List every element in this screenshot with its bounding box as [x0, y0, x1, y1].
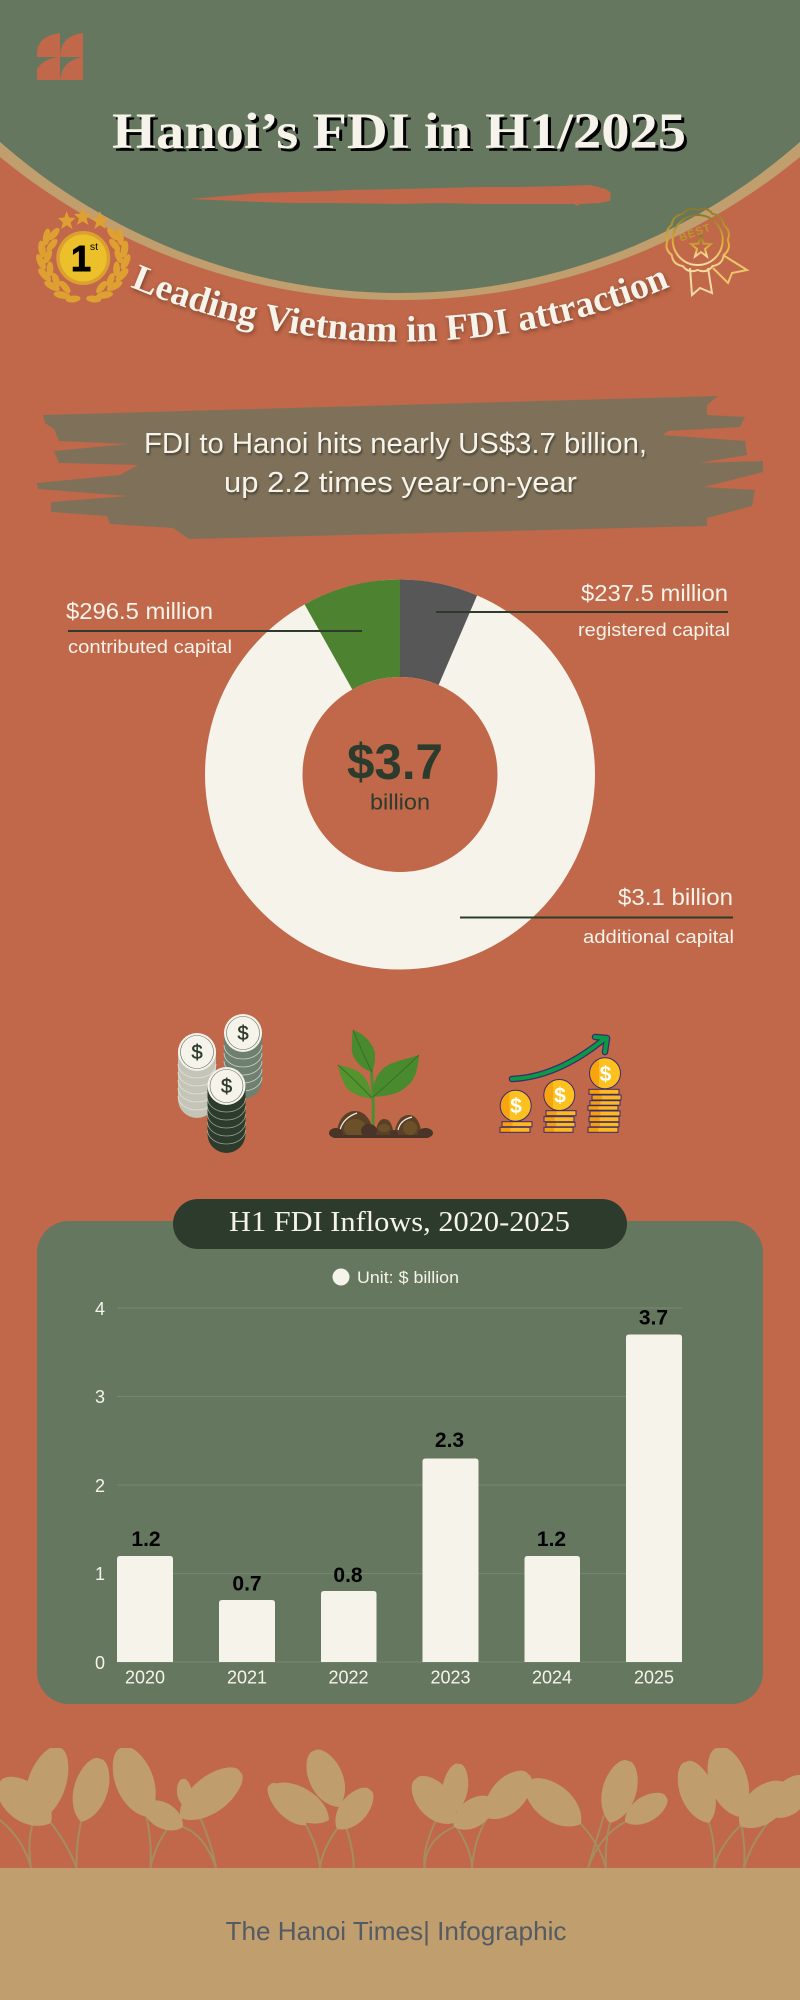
donut centre value: billion — [370, 790, 430, 814]
x axis labels: 2024 — [532, 1668, 572, 1688]
legend: Unit: $ billion — [357, 1268, 459, 1287]
panel heading: H1 FDI Inflows, 2020-2025 — [229, 1206, 570, 1238]
panel heading — [173, 1199, 627, 1249]
x axis labels: 2023 — [430, 1668, 471, 1688]
growth arrow — [512, 1037, 607, 1079]
icon: logo — [37, 33, 83, 80]
coin column 3: $ — [600, 1063, 612, 1086]
icon: coin stacks — [178, 1014, 262, 1153]
plants decoration — [0, 1741, 800, 1868]
bar values: 0.8 — [333, 1564, 363, 1587]
bar values: 1.2 — [537, 1528, 566, 1551]
y axis labels: 1 — [95, 1564, 105, 1584]
banner text: FDI to Hanoi hits nearly US$3.7 billion, — [144, 428, 647, 460]
y axis labels — [95, 1299, 105, 1673]
laurel wreath — [34, 226, 133, 303]
y axis labels: 3 — [95, 1387, 105, 1407]
icon: first place medal — [34, 207, 133, 303]
coin stack medium: $ — [237, 1023, 249, 1045]
x axis labels — [125, 1668, 674, 1688]
panel: FDI inflows chart — [37, 1199, 763, 1704]
callout: contributed capital — [66, 598, 362, 657]
icon: best seal: BEST — [678, 222, 713, 244]
x axis labels: 2020 — [125, 1668, 165, 1688]
callout: additional capital — [460, 884, 734, 947]
segment: contributed capital — [305, 580, 400, 690]
callout: registered capital — [436, 580, 730, 640]
bar values: 2.3 — [435, 1429, 464, 1452]
callout: contributed capital: contributed capital — [68, 637, 232, 657]
bars — [117, 1334, 682, 1662]
y axis labels: 2 — [95, 1476, 105, 1496]
icon: best seal — [666, 209, 747, 295]
bar values: 3.7 — [639, 1306, 668, 1330]
stars — [58, 207, 109, 229]
title: Hanoi’s FDI in H1/2025 — [112, 104, 686, 160]
curved subtitle: Leading Vietnam in FDI attraction — [130, 264, 672, 346]
banner text — [144, 428, 647, 499]
coin stack light: $ — [191, 1042, 203, 1064]
header arc — [0, 0, 800, 300]
coin column 1: $ — [510, 1095, 522, 1118]
medal text: 1 — [71, 238, 91, 279]
coin stack dark: $ — [221, 1076, 232, 1098]
x axis labels: 2021 — [227, 1668, 267, 1688]
banner text: up 2.2 times year-on-year — [224, 467, 577, 499]
leaves — [352, 1030, 375, 1072]
medal disc — [56, 231, 110, 285]
bar values: 0.7 — [232, 1572, 262, 1596]
footer — [0, 1868, 800, 2000]
segment: registered capital — [400, 580, 477, 685]
callout: contributed capital: $296.5 million — [66, 598, 213, 624]
icon: seedling — [329, 1030, 433, 1138]
donut centre value — [347, 734, 443, 814]
coin column 2: $ — [554, 1084, 566, 1108]
y axis labels: 4 — [95, 1299, 105, 1319]
callout: registered capital: registered capital — [578, 620, 730, 640]
panel background — [37, 1221, 763, 1704]
title brush stroke — [190, 185, 611, 206]
footer: The Hanoi Times| Infographic — [226, 1916, 566, 1946]
headline banner — [37, 396, 763, 539]
stem — [371, 1067, 373, 1128]
medal text: st — [90, 241, 98, 253]
bar values: 1.2 — [131, 1528, 161, 1551]
x axis labels: 2022 — [328, 1668, 369, 1688]
bar values — [131, 1306, 668, 1596]
y axis labels: 0 — [95, 1653, 105, 1673]
banner brush — [37, 396, 763, 539]
x axis labels: 2025 — [634, 1668, 674, 1688]
icon: growing coins — [500, 1037, 621, 1132]
callout: additional capital: $3.1 billion — [618, 884, 733, 910]
callout: additional capital: additional capital — [583, 927, 734, 947]
donut chart — [205, 580, 595, 970]
callout: registered capital: $237.5 million — [581, 580, 728, 606]
soil — [329, 1111, 433, 1138]
donut centre value: $3.7 — [347, 734, 443, 790]
